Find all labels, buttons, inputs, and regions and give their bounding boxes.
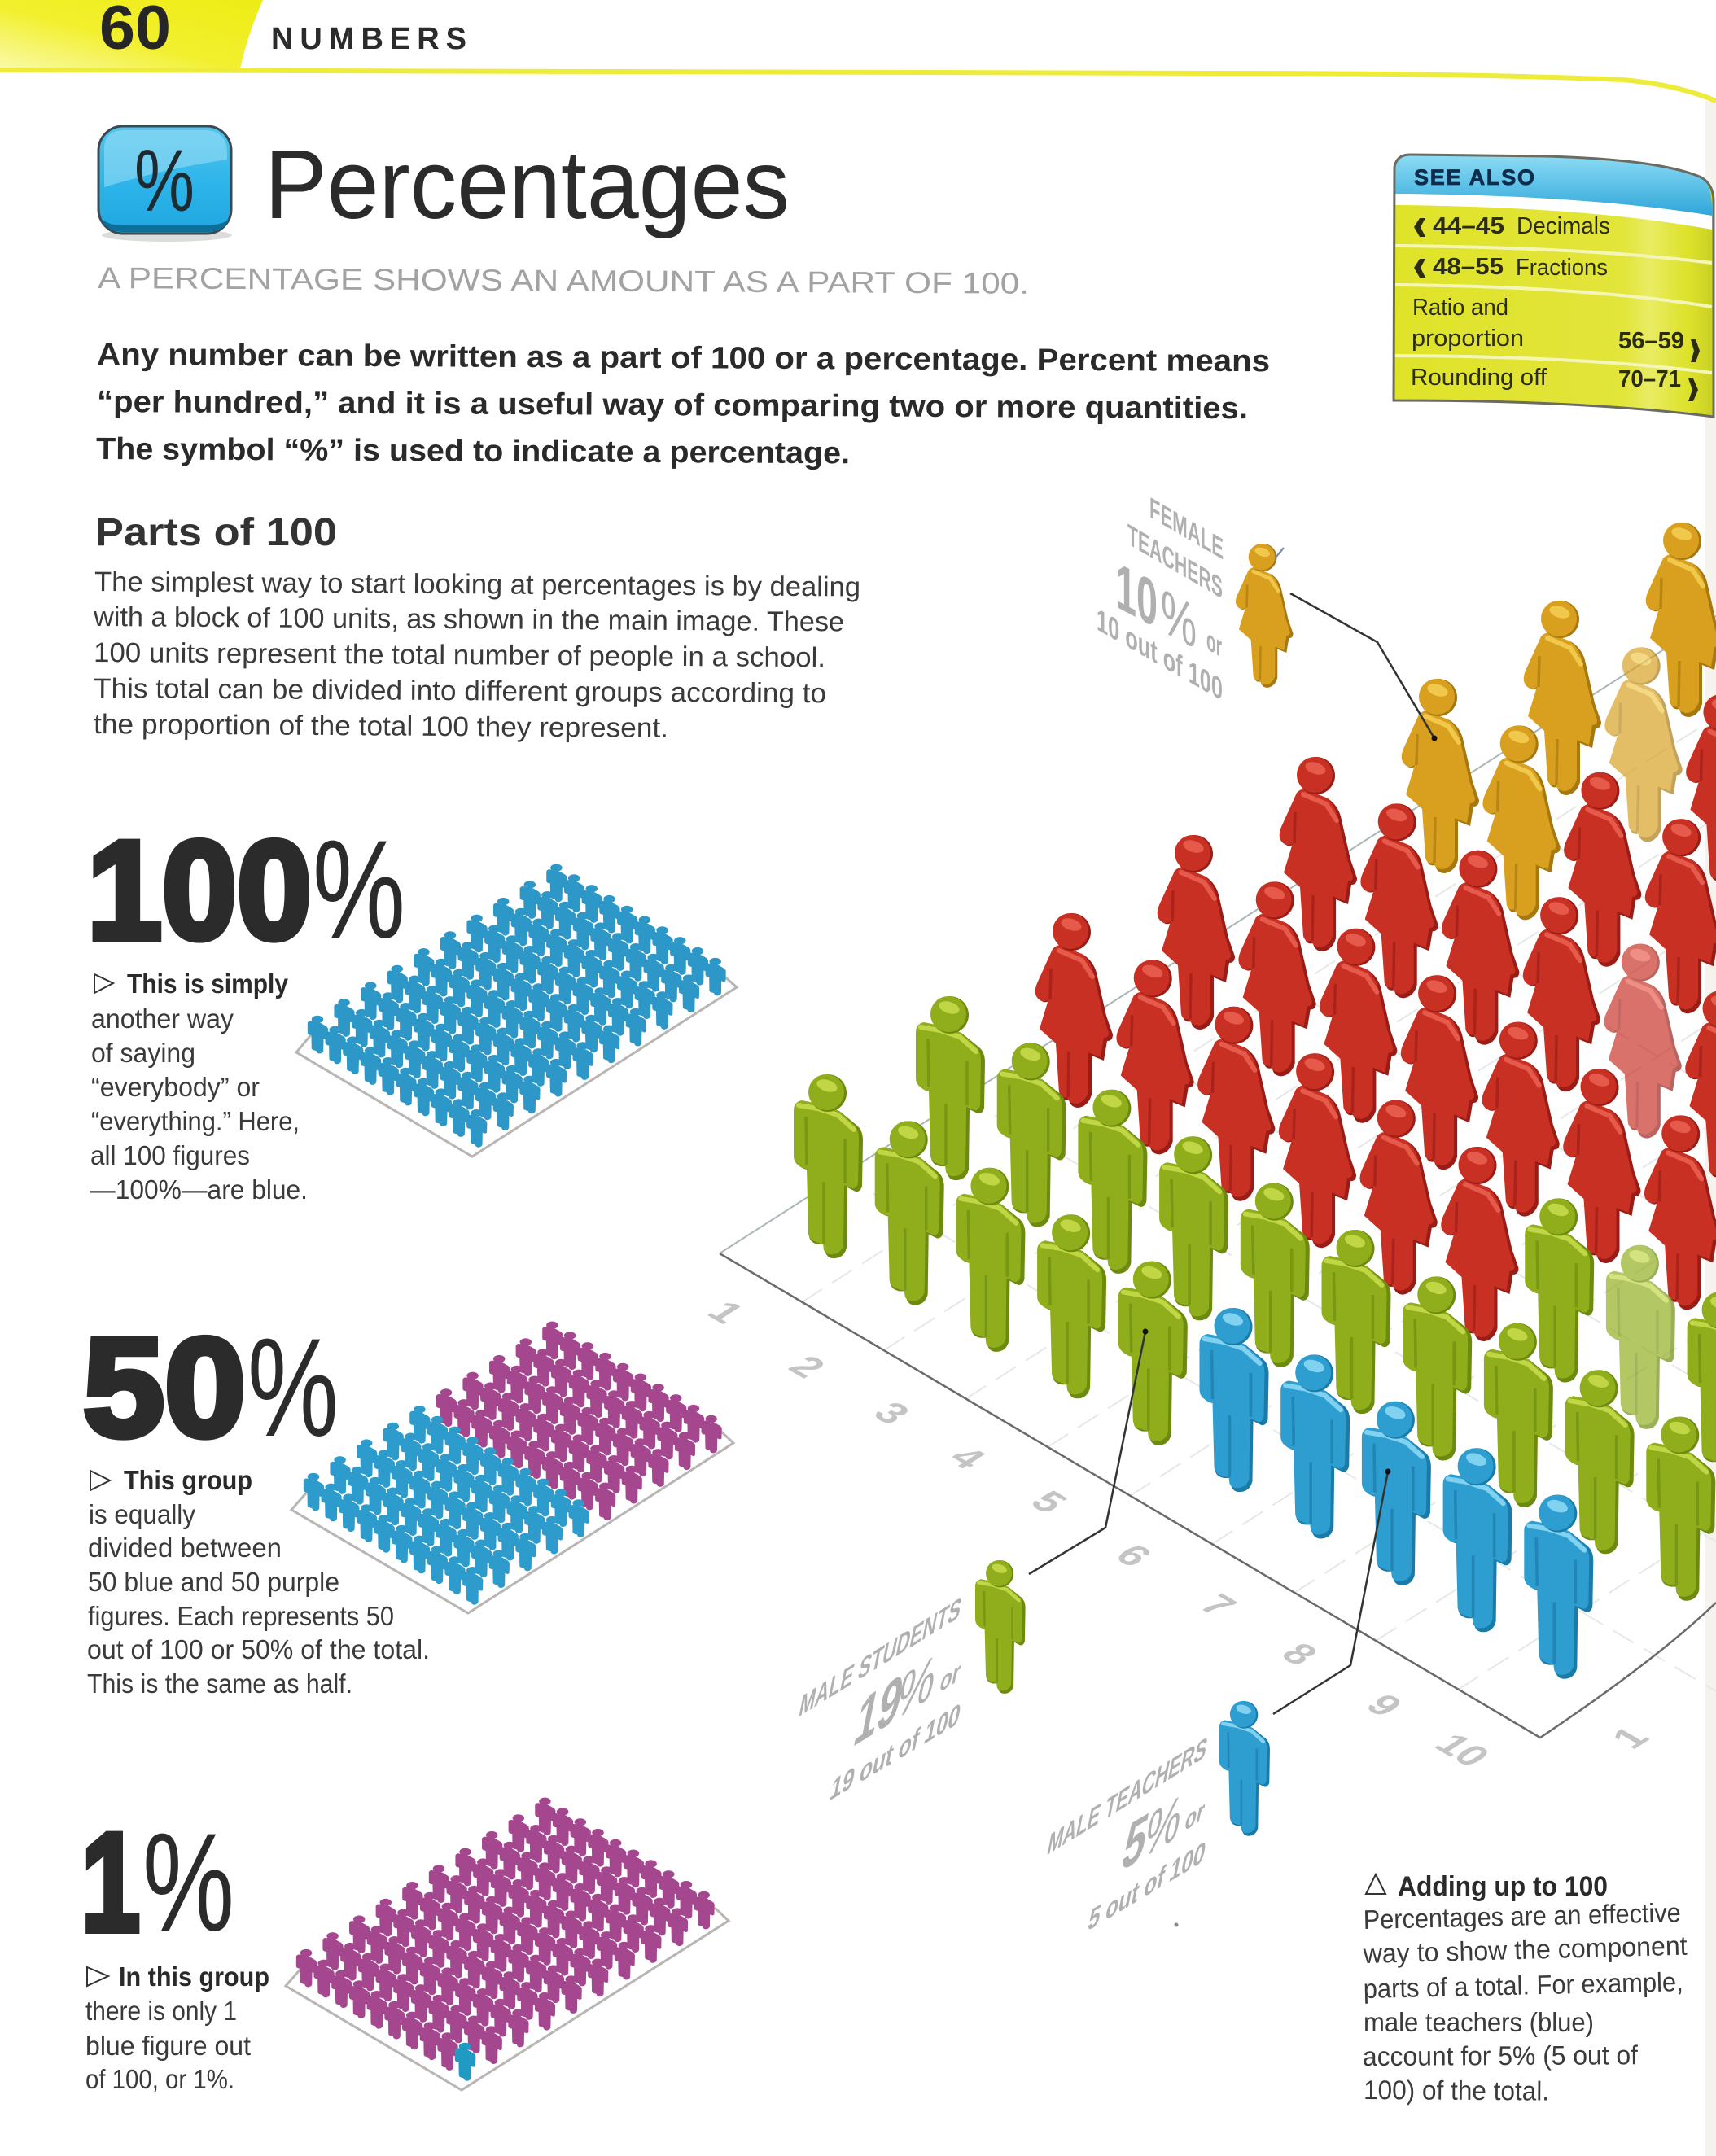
big number 1%: 1 [81,1804,140,1961]
chart: 99 purple and 1 blue figure [286,1797,729,2090]
row 4 [1158,835,1716,1310]
row 5 [1280,757,1716,1185]
intro text: Any number can be written as a part of 100 or a percentage. Percent means [97,338,1270,378]
big number 50% [83,1310,339,1466]
axis numbers: 5 [1021,1485,1076,1520]
row 2 [916,996,1715,1601]
female teachers label: or [1206,623,1222,664]
caption: adding up to 100: 100) of the total. [1364,2075,1549,2106]
caption: 1 percent: blue figure out [85,2031,251,2061]
axis numbers: 10 [1425,1728,1499,1773]
link: ratio and proportion: 56–59 [1618,328,1684,354]
caption: adding up to 100: Percentages are an effective [1363,1897,1681,1935]
caption: 100 percent: This is simply [127,969,289,999]
link: ratio and proportion [1412,295,1700,362]
axis numbers: 4 [939,1441,995,1476]
paragraph: parts of 100: the proportion of the total 100 they represent. [94,709,668,744]
female teachers label: % [1161,575,1197,663]
leader line [1276,548,1438,741]
title: Percentages [265,129,790,239]
female teachers label: TEACHERS [1127,518,1223,606]
link: rounding off: Rounding off [1411,365,1547,391]
intro text [96,338,1270,470]
female teachers label: 10 out of 100 [1097,601,1223,708]
link: decimals: 44–45 [1433,213,1504,239]
big number 100%: 100 [87,812,312,969]
axis numbers: 1 [1603,1721,1658,1755]
caption: adding up to 100: Adding up to 100 [1398,1871,1608,1902]
heading: parts of 100: Parts of 100 [95,511,337,554]
male teachers label: 5 out of 100 [1085,1834,1209,1938]
paragraph: parts of 100 [93,566,860,744]
row of female teachers [1646,523,1716,717]
chart: 100 blue figures [296,864,737,1157]
link: rounding off [1411,365,1698,401]
big number 1% [81,1804,234,1961]
icon: percent badge [98,126,232,242]
caption: 50 percent [87,1465,430,1699]
caption: 50 percent: 50 blue and 50 purple [88,1567,339,1597]
floor grid [720,616,1716,1738]
caption: 100 percent: “everything.” Here, [91,1106,300,1136]
link: fractions [1414,254,1608,281]
axis numbers: 3 [864,1397,919,1431]
caption: 1 percent: there is only 1 [85,1996,237,2026]
link: ratio and proportion: Ratio and [1412,295,1508,321]
male students label: 19 [848,1657,909,1762]
big number 50%: 50 [83,1310,246,1466]
row 3 [1035,913,1716,1476]
main chart: 100 figures [794,523,1716,1679]
male students label: % [891,1638,943,1734]
male teachers label: 5 [1116,1797,1154,1887]
caption: 50 percent: is equally [89,1499,195,1529]
icon: percent badge: % [134,131,195,230]
caption: adding up to 100 [1362,1871,1688,2106]
caption: 100 percent: another way [91,1004,234,1034]
caption: 50 percent: This is the same as half. [87,1668,352,1699]
caption: 100 percent [90,969,308,1205]
row of female teachers and students [1524,601,1716,889]
axis numbers: 1 [698,1296,753,1330]
paragraph: parts of 100: with a block of 100 units, as shown in the main image. These [93,601,844,637]
female teachers label: 10 [1115,549,1158,643]
caption: adding up to 100: account for 5% (5 out of [1363,2040,1639,2071]
caption: 1 percent: of 100, or 1%. [85,2064,234,2094]
axis numbers: 9 [1356,1689,1412,1723]
axis numbers [698,1296,1658,1773]
callout: female teachers [1097,492,1438,741]
row 1: male students and teachers [794,1074,1593,1679]
big number 1%: % [142,1804,234,1961]
link: ratio and proportion: proportion [1412,326,1524,352]
intro text: The symbol “%” is used to indicate a percentage. [96,432,850,470]
caption: adding up to 100: parts of a total. For example, [1363,1966,1683,2004]
male students label: MALE STUDENTS [796,1590,965,1724]
male teacher figure [1219,1701,1270,1836]
axis numbers: 8 [1272,1638,1327,1672]
male student figure [975,1560,1026,1694]
link: rounding off: 70–71 [1618,366,1681,392]
big number 100%: % [313,811,405,968]
paragraph: parts of 100: The simplest way to start looking at percentages is by dealing [94,566,860,603]
caption: 1 percent: In this group [119,1961,269,1992]
axis numbers: 6 [1105,1539,1161,1573]
caption: 100 percent: “everybody” or [91,1072,260,1102]
callout: male students [796,1328,1148,1808]
callout: male teachers [1044,1468,1390,1938]
axis numbers: 7 [1190,1589,1245,1623]
caption: 1 percent [85,1961,269,2094]
leader line [1273,1468,1390,1714]
caption: 100 percent: of saying [91,1038,195,1068]
female teacher figure [1236,544,1293,688]
leader line [1029,1328,1148,1574]
page gutter shading [1705,101,1716,2156]
header band [0,0,1716,101]
male teachers label: % [1139,1778,1189,1873]
intro text: “per hundred,” and it is a useful way of comparing two or more quantities. [97,385,1248,426]
female teachers label: FEMALE [1149,492,1224,566]
caption: 50 percent: out of 100 or 50% of the total. [87,1634,430,1664]
caption: 50 percent: divided between [88,1533,282,1563]
link: decimals [1414,213,1610,239]
male teachers label [1044,1730,1210,1938]
subtitle: A PERCENTAGE SHOWS AN AMOUNT AS A PART OF 100. [98,261,1029,300]
panel: 100 percent [87,811,737,1205]
link: decimals: Decimals [1517,213,1610,239]
panel: 1 percent [81,1797,729,2094]
paragraph: parts of 100: This total can be divided into different groups according to [94,673,826,709]
axis numbers: 2 [779,1350,834,1384]
paragraph: parts of 100: 100 units represent the total number of people in a school. [94,637,825,673]
see also heading: SEE ALSO [1414,165,1534,190]
caption: 50 percent: figures. Each represents 50 [88,1601,394,1631]
male teachers label: or [1182,1794,1207,1838]
caption: adding up to 100: way to show the component [1362,1931,1688,1969]
caption: 100 percent: all 100 figures [90,1140,250,1170]
caption: 100 percent: —100%—are blue. [90,1174,308,1205]
male students label [796,1590,965,1808]
big number 50%: % [247,1310,339,1466]
male teachers label: MALE TEACHERS [1044,1730,1210,1862]
chart: 50 blue and 50 purple figures [291,1321,733,1613]
male students label: or [937,1655,963,1699]
caption: adding up to 100: male teachers (blue) [1364,2007,1594,2037]
panel: 50 percent [83,1310,733,1699]
caption: 50 percent: This group [124,1465,252,1495]
panel: see also [1394,155,1714,417]
male students label: 19 out of 100 [827,1695,964,1808]
link: fractions: 48–55 [1433,254,1504,280]
link: fractions: Fractions [1516,255,1608,281]
row 6 [1402,679,1716,1013]
section name: NUMBERS [271,22,466,56]
female teachers label [1097,492,1224,708]
